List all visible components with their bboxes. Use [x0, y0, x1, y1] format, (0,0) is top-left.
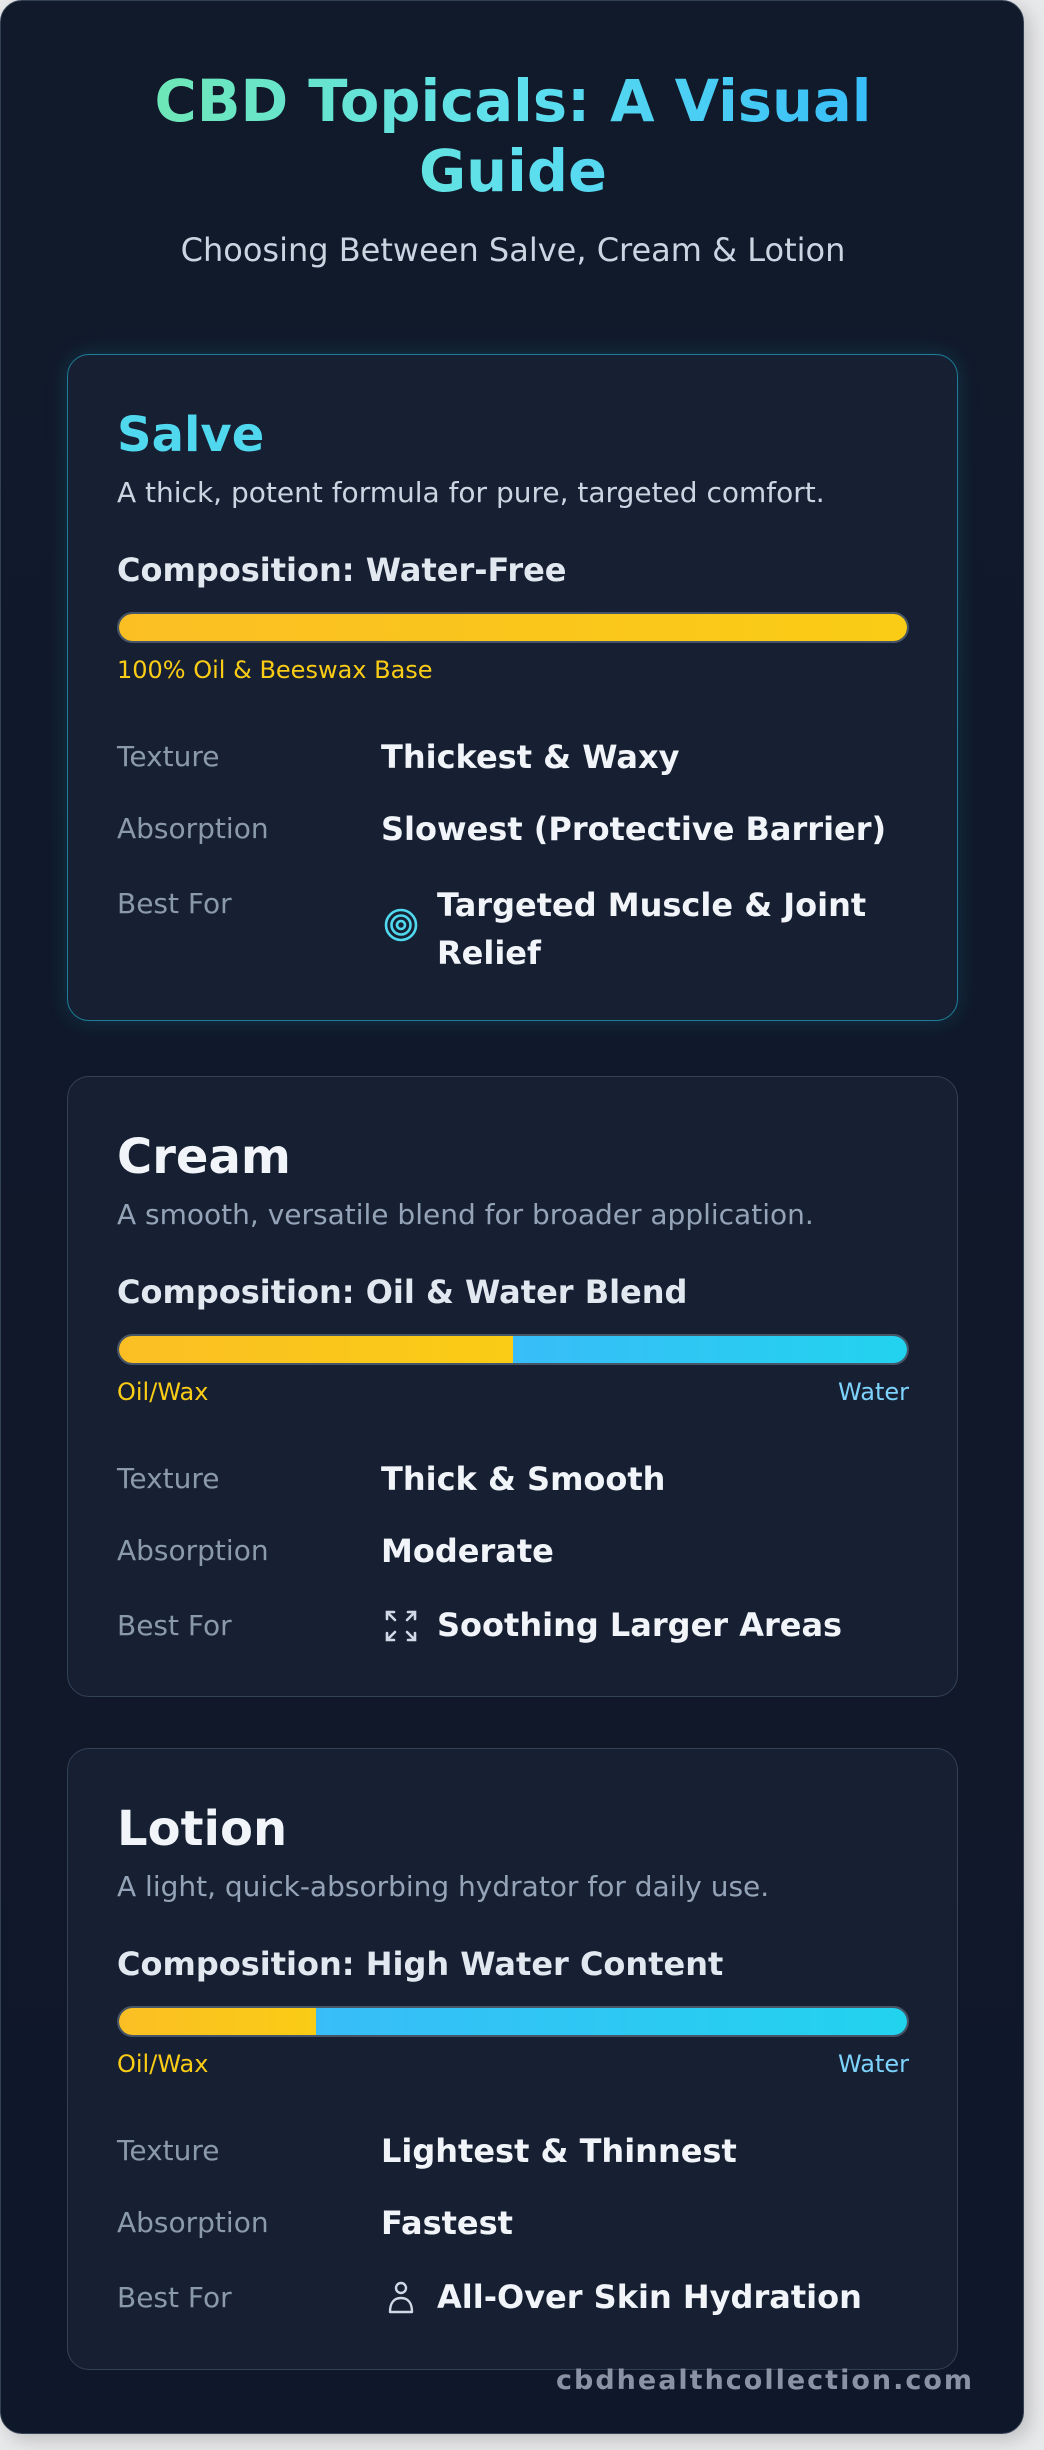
salve best for value — [437, 886, 866, 972]
cream composition bar — [117, 1334, 909, 1365]
lotion best for value: All-Over Skin Hydration — [437, 2278, 862, 2316]
lotion oil label: Oil/Wax — [117, 2050, 208, 2078]
salve composition bar — [117, 612, 909, 643]
salve description: A thick, potent formula for pure, targeted comfort. — [117, 476, 825, 509]
cream best for label: Best For — [117, 1609, 232, 1642]
cream water label: Water — [838, 1378, 909, 1406]
cream absorption value: Moderate — [381, 1532, 554, 1570]
cream best for value: Soothing Larger Areas — [437, 1606, 842, 1644]
title: CBD Topicals: A Visual — [155, 68, 871, 135]
salve bar label: 100% Oil & Beeswax Base — [117, 656, 433, 684]
cream texture label: Texture — [117, 1462, 220, 1495]
lotion composition heading: Composition: High Water Content — [117, 1945, 723, 1983]
salve heading: Salve — [117, 407, 264, 463]
salve texture label: Texture — [117, 740, 220, 773]
salve absorption label: Absorption — [117, 812, 269, 845]
salve texture value: Thickest & Waxy — [381, 738, 679, 776]
lotion absorption value: Fastest — [381, 2204, 513, 2242]
panel: lotion — [67, 1748, 958, 2370]
icon: expand arrows — [386, 1610, 416, 1642]
cream description: A smooth, versatile blend for broader application. — [117, 1198, 814, 1231]
subtitle: Choosing Between Salve, Cream & Lotion — [181, 231, 845, 269]
icon: target — [384, 908, 418, 942]
panel: salve — [67, 354, 958, 1021]
lotion composition bar — [117, 2006, 909, 2037]
lotion heading: Lotion — [117, 1801, 287, 1857]
salve composition heading: Composition: Water-Free — [117, 551, 566, 589]
salve best for label: Best For — [117, 887, 232, 920]
lotion texture value: Lightest & Thinnest — [381, 2132, 737, 2170]
lotion texture label: Texture — [117, 2134, 220, 2167]
cream oil label: Oil/Wax — [117, 1378, 208, 1406]
watermark: cbdhealthcollection.com — [556, 2365, 974, 2396]
salve best for value: Relief — [437, 934, 541, 972]
title — [155, 68, 871, 205]
lotion absorption label: Absorption — [117, 2206, 269, 2239]
cream composition heading: Composition: Oil & Water Blend — [117, 1273, 687, 1311]
salve absorption value: Slowest (Protective Barrier) — [381, 810, 886, 848]
salve best for value: Targeted Muscle & Joint — [437, 886, 866, 924]
lotion best for label: Best For — [117, 2281, 232, 2314]
icon: person — [388, 2282, 414, 2314]
title: Guide — [419, 138, 607, 205]
panel: cream — [67, 1076, 958, 1697]
cream heading: Cream — [117, 1129, 291, 1185]
cream absorption label: Absorption — [117, 1534, 269, 1567]
cream texture value: Thick & Smooth — [381, 1460, 665, 1498]
lotion water label: Water — [838, 2050, 909, 2078]
lotion description: A light, quick-absorbing hydrator for daily use. — [117, 1870, 769, 1903]
